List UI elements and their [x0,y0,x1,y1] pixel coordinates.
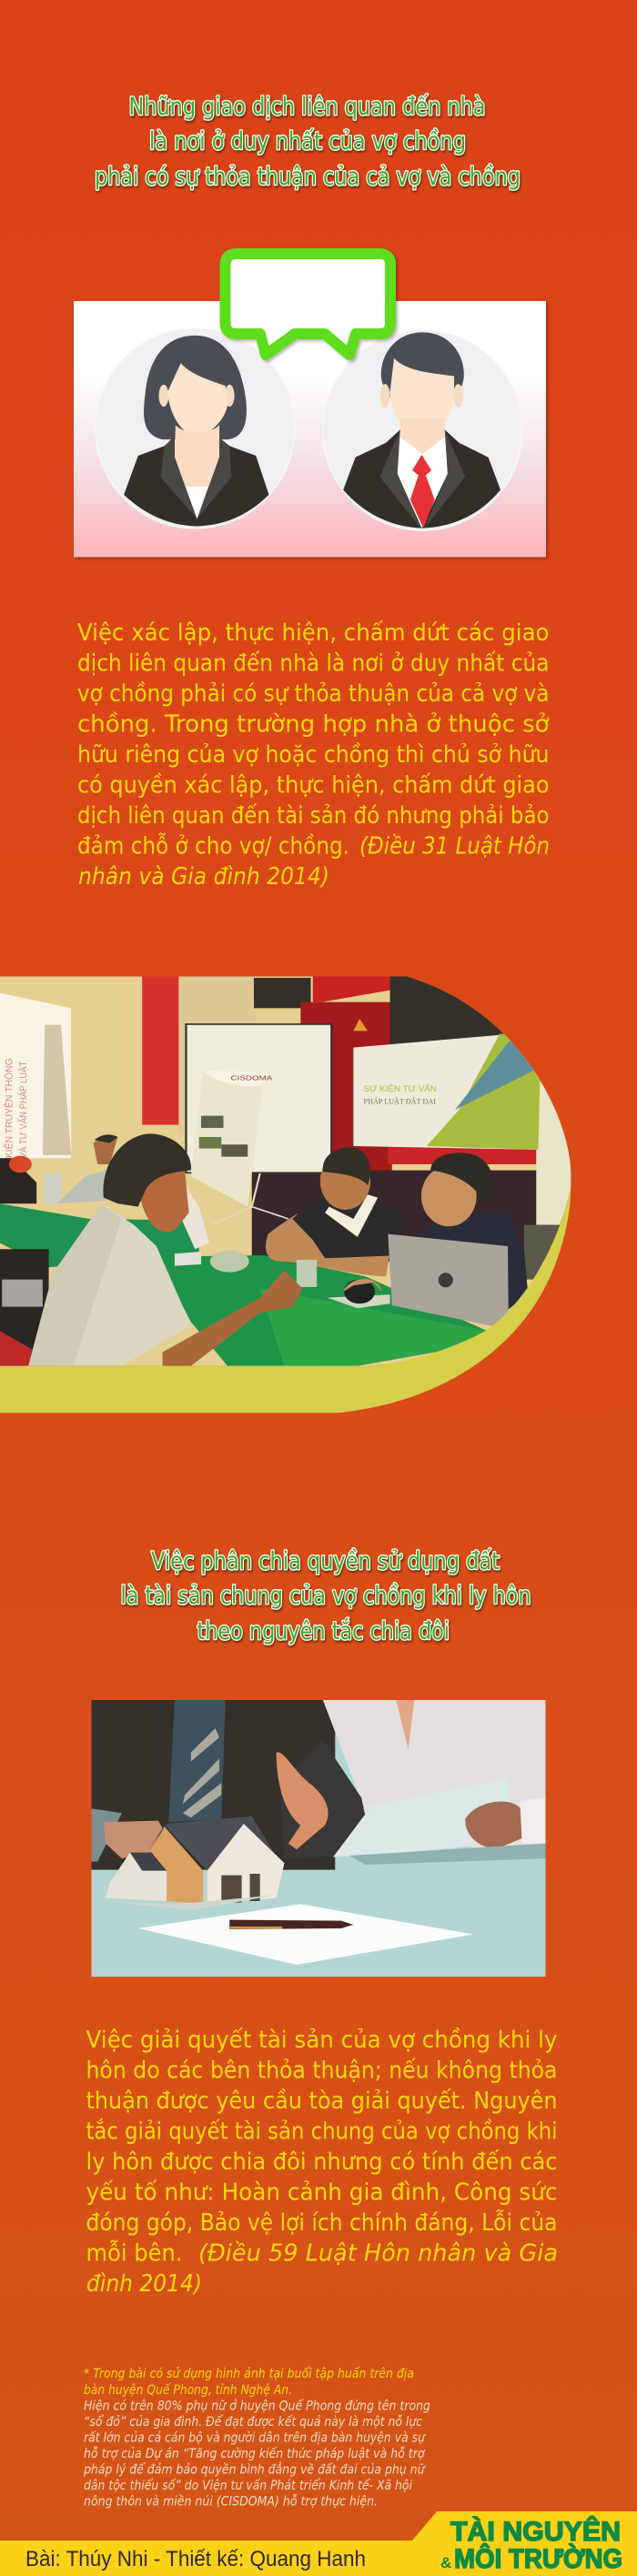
text block: body 2 [86,2027,558,2298]
icon: woman avatar [96,328,295,528]
title: section 2: là tài sản chung của vợ chồng khi ly hôn [120,1582,531,1610]
text block: body 1: dịch liên quan đến tài sản đó nhưng phải bảo [77,802,550,830]
text block: body 1: dịch liên quan đến nhà là nơi ở duy nhất của [77,649,550,677]
text block: body 1: có quyền xác lập, thực hiện, chấm dứt giao [77,771,550,799]
title: section 1 [95,93,521,191]
footnote: nông thôn và miền núi (CISDOMA) hỗ trợ thực hiện. [84,2494,378,2509]
text block: body 2: tắc giải quyết tài sản chung của vợ chồng khi [86,2118,557,2145]
text block: body 2: ly hôn được chia đôi nhưng có tính đến các [86,2148,557,2176]
panel: photo of house model and documents [91,1700,546,1977]
icon: speech bubble [226,254,390,355]
text block: body 2: đình 2014) [86,2270,202,2298]
panel: photo of legal consultation: CISDOMA [231,1074,273,1082]
credits: Bài: Thúy Nhi - Thiết kế: Quang Hanh [25,2547,366,2571]
footnote: bàn huyện Quế Phong, tỉnh Nghệ An. [84,2382,292,2398]
yellow curved frame [0,1189,571,1413]
text block: body 1: chồng. Trong trường hợp nhà ở thuộc sở [77,711,550,739]
footnote: * Trong bài có sử dụng hình ảnh tại buổi tập huấn trên địa [84,2366,414,2381]
text block: body 2: thuận được yêu cầu tòa giải quyết. Nguyên [86,2088,557,2115]
text block: body 1: (Điều 31 Luật Hôn [359,833,550,860]
logo: & [440,2554,451,2571]
panel: photo of legal consultation: KIẾN TRUYỀN THÔNG [4,1058,15,1158]
logo: TÀI NGUYÊN [450,2516,621,2547]
text block: body 2: đóng góp, Bảo vệ lợi ích chính đáng, Lỗi của [86,2209,557,2237]
logo [440,2516,622,2574]
footnote: pháp lý để đảm bảo quyền bình đẳng về đất đai của phụ nữ [83,2461,426,2478]
title: section 2: theo nguyên tắc chia đôi [197,1617,450,1645]
text block: body 1: vợ chồng phải có sự thỏa thuận của cả vợ và [77,680,550,708]
text block: body 2: hôn do các bên thỏa thuận; nếu không thỏa [86,2058,557,2085]
footnote [83,2366,430,2509]
text block: body 2: Việc giải quyết tài sản của vợ chồng khi ly [86,2027,557,2054]
title: section 1: phải có sự thỏa thuận của cả vợ và chồng [95,163,521,191]
text block: body 1: nhân và Gia đình 2014) [78,863,329,891]
text block: body 1: hữu riêng của vợ hoặc chồng thì chủ sở hữu [77,741,550,769]
footnote: dân tộc thiểu số” do Viện tư vấn Phát triển Kinh tế- Xã hội [84,2478,412,2493]
text block: body 1: Việc xác lập, thực hiện, chấm dứt các giao [77,619,550,647]
panel: couple illustration [74,254,546,557]
panel: photo of legal consultation: SỰ KIỆN TƯ VẤN [364,1084,437,1094]
title: section 1: Những giao dịch liên quan đến nhà [129,93,486,121]
text block: body 2: yếu tố như: Hoàn cảnh gia đình, Công sức [86,2179,557,2207]
text block: body 1: đảm chỗ ở cho vợ/ chồng. [77,833,349,860]
title: section 2 [120,1547,531,1645]
icon: man avatar [323,330,522,530]
text block: body 1 [77,619,550,891]
footnote: rất lớn của cả cán bộ và người dân trên địa bàn huyện và sự [84,2430,427,2445]
footnote: Hiện có trên 80% phụ nữ ở huyện Quế Phong đứng tên trong [84,2398,430,2414]
text block: body 2: (Điều 59 Luật Hôn nhân và Gia [198,2239,558,2267]
logo: MÔI TRƯỜNG [454,2543,622,2574]
panel: photo of legal consultation: PHÁP LUẬT ĐẤT ĐAI [364,1096,436,1106]
text block: body 2: mỗi bên. [86,2239,182,2267]
footer band [0,2511,637,2576]
title: section 1: là nơi ở duy nhất của vợ chồng [149,127,466,156]
panel: photo of legal consultation [0,976,577,1413]
footnote: “sổ đỏ” của gia đình. Để đạt được kết quả này là một nỗ lực [84,2414,422,2430]
footnote: hỗ trợ của Dự án “Tăng cường kiến thức pháp luật và hỗ trợ [84,2446,425,2461]
title: section 2: Việc phân chia quyền sử dụng đất [151,1547,500,1575]
panel: photo of legal consultation: VÀ TƯ VẤN PHÁP LUẬT [18,1061,29,1158]
